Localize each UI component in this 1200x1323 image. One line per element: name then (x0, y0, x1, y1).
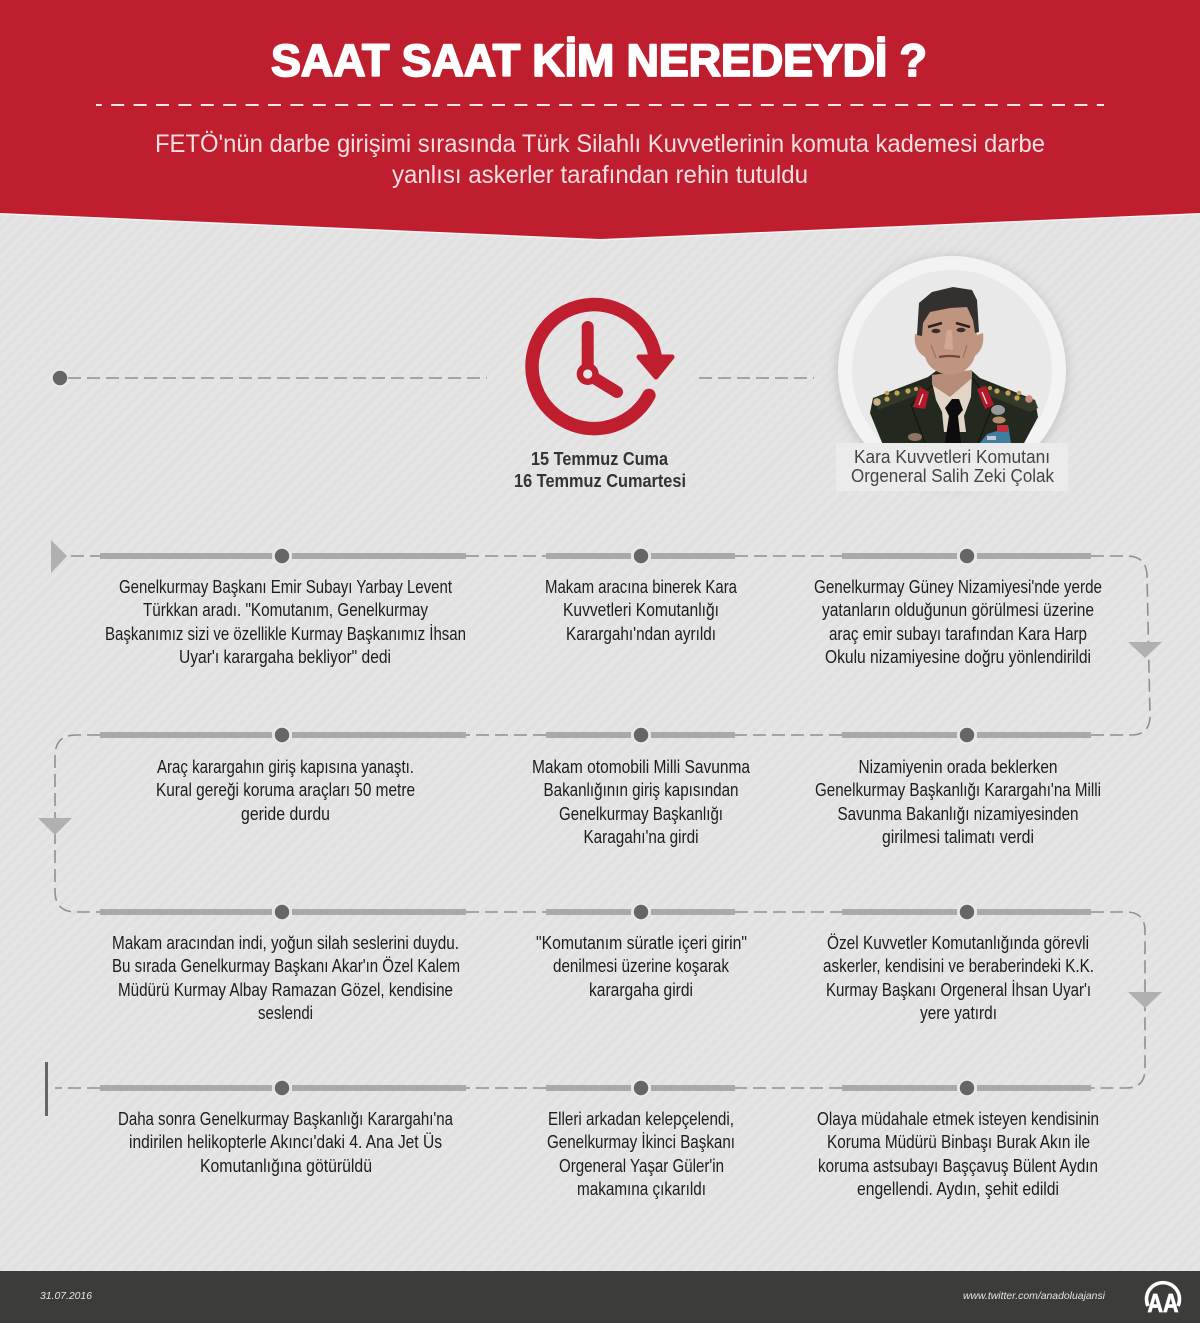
row 2 text (156, 756, 1101, 847)
portrait caption (851, 447, 1055, 486)
step 2: Makam aracına binerek Kara (545, 576, 738, 597)
footer bar (0, 1271, 1200, 1323)
step 4: girilmesi talimatı verdi (882, 826, 1034, 847)
step 3: yatanların olduğunun görülmesi üzerine (822, 599, 1094, 620)
step 1 (105, 576, 466, 667)
step 4: Nizamiyenin orada beklerken (858, 756, 1058, 777)
step 9: Özel Kuvvetler Komutanlığında görevli (827, 932, 1089, 953)
step 5 (532, 756, 751, 847)
step 7: seslendi (258, 1002, 313, 1023)
subtitle: FETÖ'nün darbe girişimi sırasında Türk Silahlı Kuvvetlerinin komuta kademesi darbe (155, 130, 1045, 158)
arrow left (38, 818, 72, 835)
date label: 15 Temmuz Cuma (531, 449, 669, 469)
portrait: Salih Zeki Çolak (836, 256, 1068, 491)
step 6 (156, 756, 415, 824)
icon: agency logo: AA (1148, 1288, 1179, 1318)
row 1 text (105, 576, 1102, 667)
row 2 markers (100, 727, 1091, 743)
step 11 (547, 1108, 735, 1199)
step 7 (112, 932, 460, 1023)
header banner (0, 0, 1200, 239)
subtitle (155, 130, 1045, 189)
step 6: Araç karargahın giriş kapısına yanaştı. (157, 756, 414, 777)
date label (514, 449, 686, 491)
step 11: Orgeneral Yaşar Güler'in (559, 1155, 724, 1176)
step 9: yere yatırdı (920, 1002, 997, 1023)
step 12: indirilen helikopterle Akıncı'daki 4. Ana Jet Üs (129, 1131, 442, 1152)
step 9 (823, 932, 1094, 1023)
step 4: Savunma Bakanlığı nizamiyesinden (838, 803, 1078, 824)
source url: www.twitter.com/anadoluajansi (963, 1290, 1106, 1302)
row 3 text (112, 932, 1094, 1023)
step 10 (817, 1108, 1099, 1199)
step 5: Makam otomobili Milli Savunma (532, 756, 751, 777)
step 10: Olaya müdahale etmek isteyen kendisinin (817, 1108, 1099, 1129)
portrait caption: Kara Kuvvetleri Komutanı (854, 447, 1050, 467)
step 3: araç emir subayı tarafından Kara Harp (829, 623, 1087, 644)
title: SAAT SAAT KİM NEREDEYDİ ? (271, 35, 927, 86)
date: 31.07.2016 (40, 1290, 92, 1302)
end marker (45, 1062, 48, 1116)
step 3: Okulu nizamiyesine doğru yönlendirildi (825, 646, 1091, 667)
step 10: koruma astsubayı Başçavuş Bülent Aydın (818, 1155, 1098, 1176)
step 12: Komutanlığına götürüldü (200, 1155, 372, 1176)
portrait caption: Orgeneral Salih Zeki Çolak (851, 466, 1055, 486)
row 4 text (118, 1108, 1099, 1199)
step 11: Elleri arkadan kelepçelendi, (548, 1108, 734, 1129)
step 10: Koruma Müdürü Binbaşı Burak Akın ile (827, 1131, 1090, 1152)
row 3 markers (100, 904, 1091, 920)
step 9: askerler, kendisini ve beraberindeki K.K. (823, 955, 1094, 976)
row 1 markers (100, 548, 1091, 564)
step 10: engellendi. Aydın, şehit edildi (857, 1178, 1059, 1199)
arrow right 2 (1128, 992, 1162, 1008)
step 6: geride durdu (241, 803, 330, 824)
step 12 (118, 1108, 454, 1176)
step 11: Genelkurmay İkinci Başkanı (547, 1131, 735, 1152)
step 5: Bakanlığının giriş kapısından (544, 779, 738, 800)
step 8 (536, 932, 747, 1000)
step 7: Müdürü Kurmay Albay Ramazan Gözel, kendisine (118, 979, 453, 1000)
figure in uniform (870, 287, 1038, 445)
row 4 markers (100, 1080, 1091, 1096)
step 8: "Komutanım süratle içeri girin" (536, 932, 747, 953)
step 6: Kural gereği koruma araçları 50 metre (156, 779, 415, 800)
step 1: Türkkan aradı. "Komutanım, Genelkurmay (143, 599, 429, 620)
arrow right 1 (1128, 642, 1162, 658)
step 11: makamına çıkarıldı (577, 1178, 706, 1199)
step 5: Karagahı'na girdi (584, 826, 698, 847)
step 1: Genelkurmay Başkanı Emir Subayı Yarbay Levent (119, 576, 452, 597)
timeline dashed connector path (38, 540, 1162, 1116)
subtitle: yanlısı askerler tarafından rehin tutuldu (392, 161, 808, 189)
step 2: Karargahı'ndan ayrıldı (566, 623, 716, 644)
step 12: Daha sonra Genelkurmay Başkanlığı Karargahı'na (118, 1108, 454, 1129)
step 8: karargaha girdi (589, 979, 693, 1000)
intro timeline connector (52, 370, 814, 386)
start arrow (51, 540, 67, 573)
step 1: Başkanımız sizi ve özellikle Kurmay Başkanımız İhsan (105, 623, 466, 644)
step 7: Bu sırada Genelkurmay Başkanı Akar'ın Özel Kalem (112, 955, 460, 976)
date label: 16 Temmuz Cumartesi (514, 471, 686, 491)
step 5: Genelkurmay Başkanlığı (559, 803, 723, 824)
step 2 (545, 576, 738, 644)
step 8: denilmesi üzerine koşarak (553, 955, 730, 976)
step 3: Genelkurmay Güney Nizamiyesi'nde yerde (814, 576, 1102, 597)
step 4: Genelkurmay Başkanlığı Karargahı'na Milli (815, 779, 1101, 800)
face (915, 305, 983, 375)
step 1: Uyar'ı karargaha bekliyor" dedi (179, 646, 391, 667)
step 2: Kuvvetleri Komutanlığı (563, 599, 719, 620)
step 3 (814, 576, 1102, 667)
icon: clock with arrow (532, 305, 672, 429)
step 4 (815, 756, 1101, 847)
step 9: Kurmay Başkanı Orgeneral İhsan Uyar'ı (826, 979, 1091, 1000)
step 7: Makam aracından indi, yoğun silah seslerini duydu. (112, 932, 459, 953)
